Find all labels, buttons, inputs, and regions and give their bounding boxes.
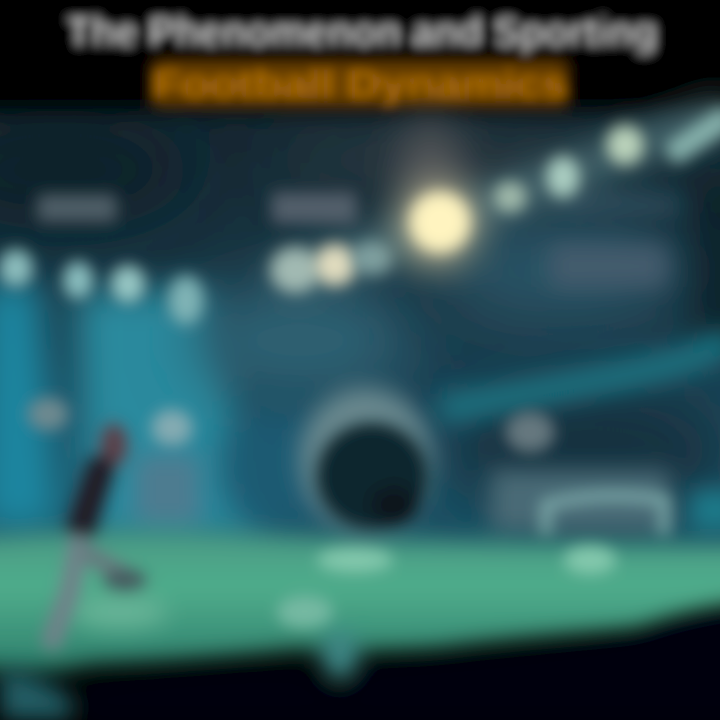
- teal ribbon on the right: [440, 340, 720, 410]
- light arc: diagonal stadium lights: [271, 110, 720, 292]
- subtitle highlighted in gold: Football Dynamics: [152, 64, 568, 106]
- goal: [546, 496, 664, 535]
- panel: stadium sky background: [0, 100, 720, 580]
- left floodlights: [0, 250, 203, 324]
- right stand area: [490, 412, 720, 532]
- title: The Phenomenon and Sporting: [67, 8, 657, 55]
- left small labels: [28, 398, 200, 525]
- panel text: upper centre label: [272, 193, 356, 223]
- top black header band: [0, 0, 720, 110]
- player: [52, 423, 147, 640]
- soccer ball: [300, 388, 432, 532]
- panel text: upper left label: [38, 195, 116, 221]
- panel: pitch: [0, 531, 720, 672]
- dark foreground crowd: [0, 608, 720, 720]
- panel text: upper right block: [550, 195, 680, 287]
